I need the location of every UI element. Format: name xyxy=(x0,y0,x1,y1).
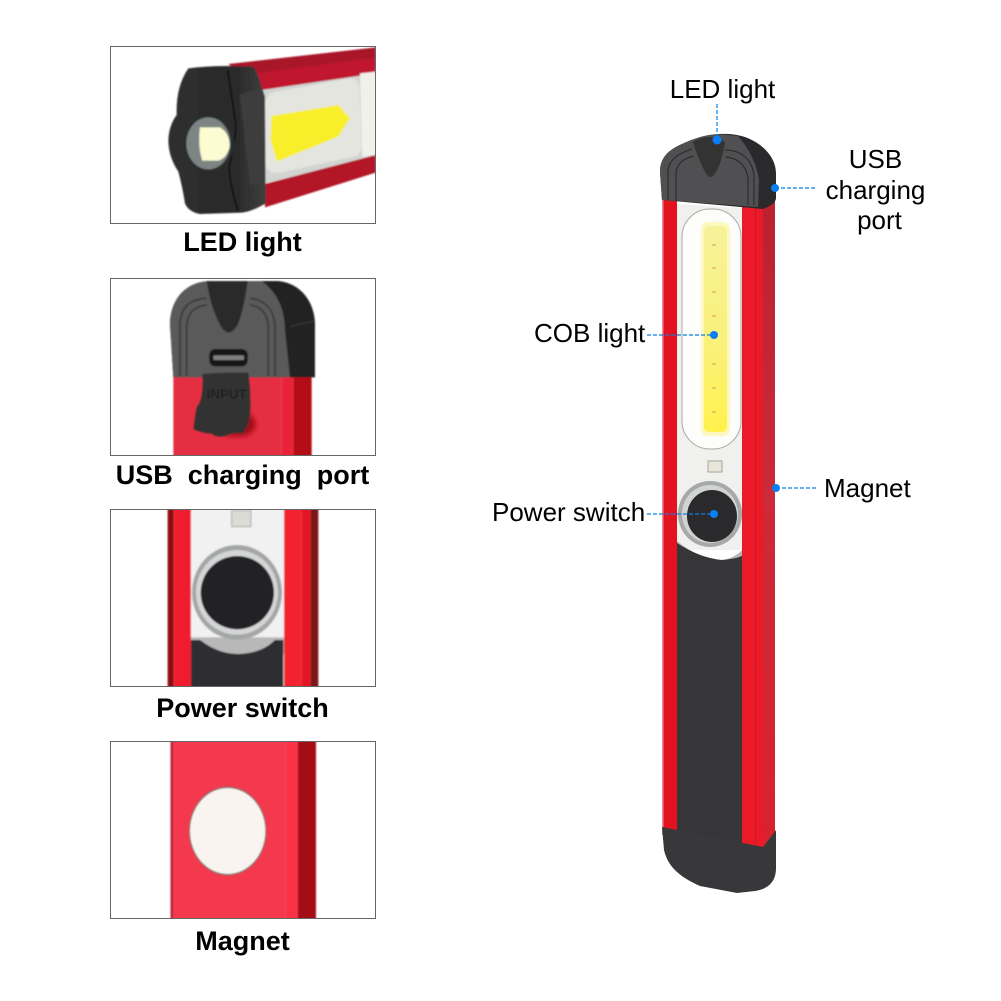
caption: Power switch: Power switch xyxy=(156,693,329,723)
photo: power switch close-up xyxy=(166,510,320,686)
panel: Power switch xyxy=(110,507,376,723)
callout: COB light: COB light xyxy=(534,318,646,348)
callout: USB charging port xyxy=(771,144,925,235)
COB light strip xyxy=(701,222,730,436)
callout: COB light xyxy=(534,318,718,348)
black grip panel xyxy=(677,543,742,845)
panel: LED light xyxy=(110,46,376,257)
callout: Magnet xyxy=(772,473,911,503)
caption: USB charging port: USB charging port xyxy=(116,460,369,490)
caption: Magnet: Magnet xyxy=(195,926,290,956)
LED chip mark xyxy=(708,461,722,472)
callout: USB charging port: port xyxy=(857,205,903,235)
panel: Magnet xyxy=(110,739,376,956)
callout: USB charging port: charging xyxy=(826,175,925,205)
callout: LED light: LED light xyxy=(670,74,776,104)
power switch xyxy=(677,481,742,565)
callout: Power switch xyxy=(492,497,718,527)
product: flashlight xyxy=(660,134,776,893)
callout: USB charging port: USB xyxy=(849,144,902,174)
light window xyxy=(677,204,742,550)
callout: LED light xyxy=(670,74,776,144)
photo: LED light close-up xyxy=(167,47,375,216)
right red rail xyxy=(742,200,775,852)
panel: USB charging port xyxy=(110,278,376,490)
embossed tab text: INPUT xyxy=(207,386,247,401)
left red rail xyxy=(662,195,677,835)
panel border xyxy=(110,278,376,456)
bottom cap xyxy=(662,827,776,893)
callout: Power switch: Power switch xyxy=(492,497,645,527)
top cap xyxy=(660,134,776,209)
panel border xyxy=(110,510,376,686)
photo: magnet close-up xyxy=(170,742,318,918)
photo: USB port close-up xyxy=(169,280,316,455)
panel border xyxy=(110,742,376,918)
caption: LED light: LED light xyxy=(183,227,302,257)
panel border xyxy=(110,46,376,224)
callout: Magnet: Magnet xyxy=(824,473,911,503)
